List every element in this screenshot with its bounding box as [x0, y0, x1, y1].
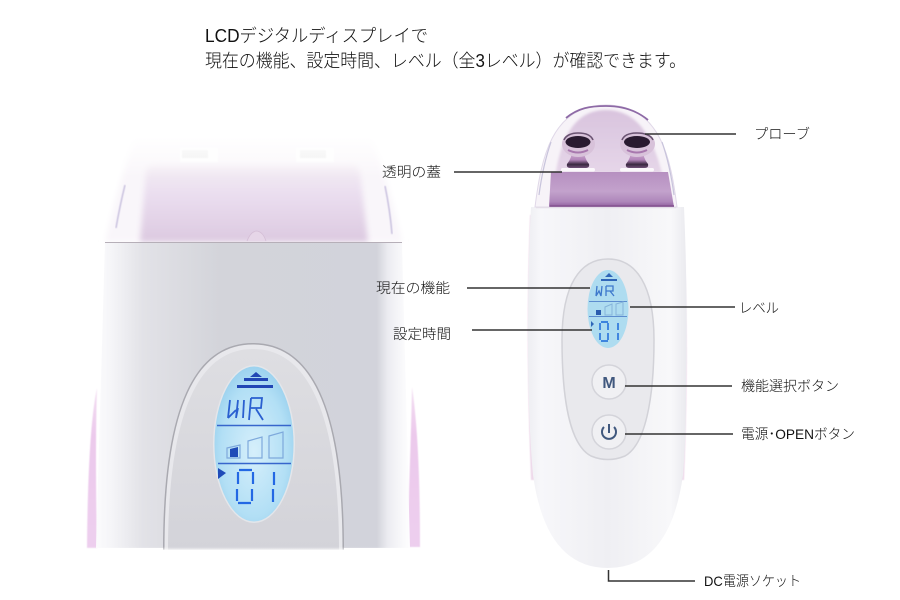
- timer digits 01: [600, 322, 618, 341]
- title: 現在の機能、設定時間、レベル（全3レベル）が確認できます。: [205, 51, 686, 71]
- white body: [528, 207, 687, 568]
- timer digits 01: [237, 470, 274, 503]
- LCD divider lines: [217, 426, 291, 464]
- pink side edges: [87, 387, 420, 548]
- transparent cap: [535, 105, 677, 207]
- callout: set time: 設定時間: [393, 326, 451, 342]
- gray body: [96, 242, 410, 548]
- callout: power/open button: 電源･OPENボタン: [741, 426, 855, 442]
- callout: DC socket: DC電源ソケット: [704, 573, 801, 589]
- pink body edges: [528, 215, 687, 480]
- level bars: [227, 432, 283, 458]
- M button: M: [602, 375, 616, 392]
- callout: function select button: 機能選択ボタン: [741, 378, 839, 394]
- callout: current function: 現在の機能: [376, 280, 450, 296]
- enlarged device close-up: [70, 125, 430, 563]
- timer arrow: [218, 468, 226, 479]
- function indicator: [237, 372, 273, 388]
- white fade at bottom: [70, 549, 430, 563]
- title: [205, 26, 686, 71]
- transparent cap: [100, 125, 410, 242]
- callout: probe: プローブ: [754, 126, 810, 142]
- mode text WR: [228, 398, 263, 420]
- control bezel: [163, 343, 344, 550]
- probe left: [561, 132, 595, 172]
- full device: [528, 105, 687, 568]
- LCD divider lines: [589, 302, 627, 316]
- M button: [592, 365, 626, 399]
- control bezel: [562, 259, 654, 460]
- mode text WR: [596, 286, 614, 296]
- purple base: [549, 172, 674, 207]
- function indicator: [601, 273, 617, 281]
- level bars: [596, 302, 623, 315]
- callout: transparent lid: 透明の蓋: [382, 164, 441, 180]
- LCD screen: [588, 270, 628, 348]
- callout: DC socket: [608, 570, 801, 589]
- title: LCDデジタルディスプレイで: [205, 26, 428, 46]
- power button: [592, 415, 626, 449]
- LCD screen: [213, 365, 295, 523]
- probe right: [620, 132, 655, 172]
- callout: level: レベル: [739, 300, 779, 316]
